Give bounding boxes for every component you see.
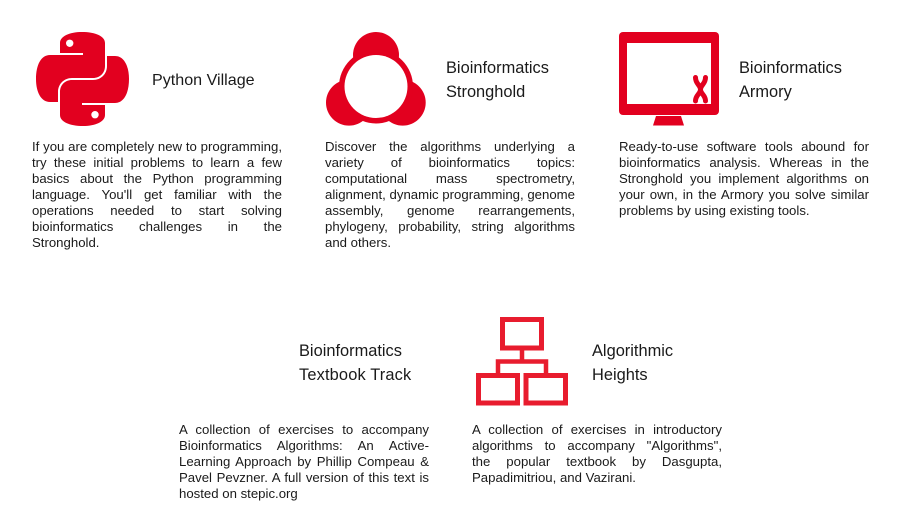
text: Python Village description: bioinformatics challenges in the	[32, 219, 282, 234]
text: Algorithmic Heights description	[472, 422, 722, 485]
text: Stronghold description: assembly, genome rearrangements,	[325, 203, 575, 218]
text: Armory description: your own, in the Armory you solve similar	[619, 187, 869, 202]
heading: Bioinformatics Stronghold: Bioinformatics	[446, 59, 549, 77]
text: Textbook Track description: hosted on stepic.org	[179, 486, 298, 501]
text: Stronghold description: variety of bioinformatics topics:	[325, 155, 575, 170]
heading: Bioinformatics Textbook Track: Bioinformatics	[299, 342, 402, 360]
text: Python Village description: If you are completely new to programming,	[32, 139, 282, 154]
panel: Algorithmic Heights	[472, 317, 722, 485]
text: Armory description: bioinformatics analysis. Whereas in the	[619, 155, 869, 170]
text: Stronghold description: phylogeny, probability, string algorithms	[325, 219, 575, 234]
text: Stronghold description: computational mass spectrometry,	[325, 171, 575, 186]
icon: hierarchy boxes	[476, 317, 568, 406]
panel: Bioinformatics Stronghold	[325, 32, 575, 250]
heading: Bioinformatics Armory: Armory	[739, 83, 792, 101]
text: Stronghold description: Discover the algorithms underlying a	[325, 139, 575, 154]
heading: Bioinformatics Stronghold	[446, 59, 549, 101]
text: Algorithmic Heights description: A collection of exercises in introductory	[472, 422, 722, 437]
heading: Bioinformatics Armory	[739, 59, 842, 101]
text: Algorithmic Heights description: Papadimitriou, and Vazirani.	[472, 470, 636, 485]
text: Stronghold description	[325, 139, 575, 250]
icon: monitor with chromosome	[619, 32, 719, 126]
panel: Bioinformatics Textbook Track	[179, 342, 429, 501]
text: Armory description: Stronghold you implement algorithms on	[619, 171, 869, 186]
panel: Python Village	[32, 32, 282, 250]
heading: Bioinformatics Textbook Track	[299, 342, 412, 384]
heading: Bioinformatics Textbook Track: Textbook Track	[299, 366, 411, 384]
heading: Algorithmic Heights: Algorithmic	[592, 342, 673, 360]
text: Textbook Track description: Bioinformatics Algorithms: An Active-	[179, 438, 429, 453]
text: Stronghold description: and others.	[325, 235, 391, 250]
text: Python Village description: try these initial problems to learn a few	[32, 155, 282, 170]
panel: Bioinformatics Armory	[619, 32, 869, 218]
text: Python Village description: language. You'll get familiar with the	[32, 187, 282, 202]
text: Python Village description	[32, 139, 282, 250]
heading: Bioinformatics Armory: Bioinformatics	[739, 59, 842, 77]
text: Textbook Track description: A collection of exercises to accompany	[179, 422, 429, 437]
text: Textbook Track description: Pavel Pevzner. A full version of this text is	[179, 470, 429, 485]
heading: Bioinformatics Stronghold: Stronghold	[446, 83, 525, 101]
heading: Algorithmic Heights: Heights	[592, 366, 648, 384]
text: Stronghold description: alignment, dynamic programming, genome	[325, 187, 575, 202]
text: Armory description: problems by using existing tools.	[619, 203, 810, 218]
icon: ring with three circles	[326, 32, 426, 126]
text: Armory description	[619, 139, 869, 218]
text: Algorithmic Heights description: the popular textbook by Dasgupta,	[472, 454, 722, 469]
icon: python logo	[36, 32, 129, 126]
text: Textbook Track description: Learning Approach by Phillip Compeau &	[179, 454, 429, 469]
text: Python Village description: operations needed to start solving	[32, 203, 282, 218]
text: Armory description: Ready-to-use software tools abound for	[619, 139, 869, 154]
text: Python Village description: basics about the Python programming	[32, 171, 282, 186]
text: Algorithmic Heights description: algorithms to accompany "Algorithms",	[472, 438, 722, 453]
text: Python Village description: Stronghold.	[32, 235, 99, 250]
heading: Algorithmic Heights	[592, 342, 673, 384]
heading: Python Village: Python Village	[152, 71, 255, 89]
text: Textbook Track description	[179, 422, 429, 501]
